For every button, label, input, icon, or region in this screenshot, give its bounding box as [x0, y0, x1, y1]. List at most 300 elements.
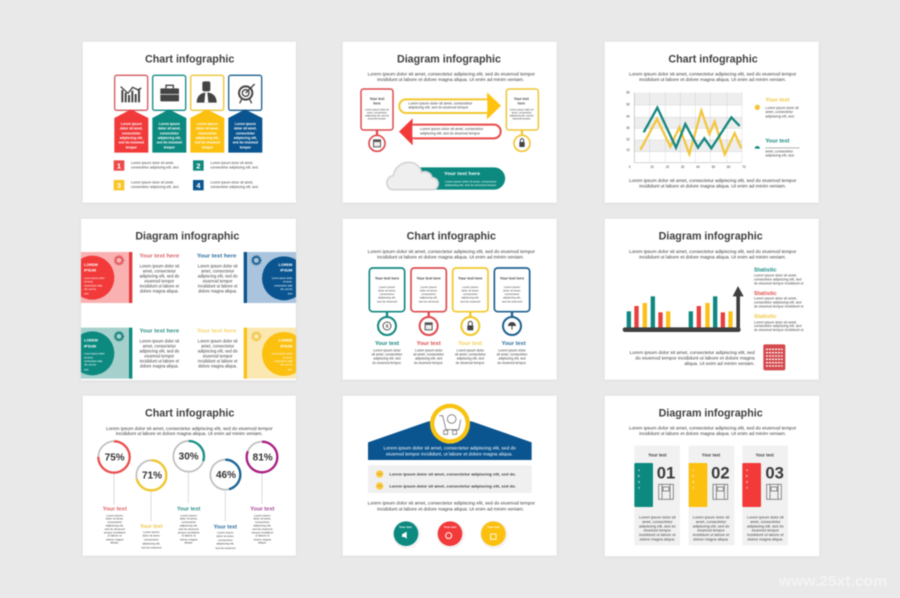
column 01: dolore magna aliqua. — [639, 538, 675, 542]
card: blue target icon — [228, 75, 262, 153]
block: teal: elit, sed do — [84, 364, 97, 367]
card: yellow: sit amet, consectetur — [455, 353, 487, 357]
column 02: incididunt ut labore et — [693, 533, 730, 537]
ring: 46 percent blue: consectetur — [218, 538, 233, 542]
callout: red box with calendar: Lorem ipsum dolor sit — [365, 109, 389, 112]
icon: shopping cart badge — [430, 404, 470, 444]
text column: yellow heading — [197, 329, 238, 369]
ring: 75 percent red: 75% — [105, 452, 125, 463]
intro text — [106, 426, 273, 436]
column 01: Lorem ipsum dolor sit — [639, 516, 677, 520]
text: teal card: adipiscing elit, — [158, 136, 181, 140]
card: teal: Lorem ipsum — [379, 285, 396, 289]
text column: yellow heading: amet, consectetur — [201, 344, 235, 349]
intro text: Lorem ipsum dolor sit amet, consectetur adipiscing elit, sed do eiusmod tempor — [368, 501, 535, 506]
text column: yellow heading: eiusmod tempor — [203, 354, 233, 359]
title: Diagram infographic — [135, 231, 239, 243]
axis labels: 20 — [626, 138, 630, 142]
text column: red heading: dolore magna aliqua. — [140, 289, 179, 294]
axis labels: 40 — [626, 114, 630, 118]
intro text: Lorem ipsum dolor sit amet, consectetur adipiscing elit, sed do eiusmod tempor — [629, 71, 797, 76]
callout: yellow box with padlock: Your text — [514, 97, 530, 101]
card: blue: sed do eiusmod — [502, 299, 522, 303]
block: red: sit amet, — [84, 281, 94, 284]
card: red: sit amet, consectetur — [413, 353, 445, 357]
card: blue: Your text — [502, 341, 526, 347]
title: Diagram infographic — [659, 408, 763, 420]
legend item 3: 3 — [117, 181, 121, 190]
axis labels — [626, 90, 746, 169]
ring: 46 percent blue: Your text — [214, 524, 237, 530]
ring: 75 percent red — [98, 441, 130, 545]
ring: 30 percent teal — [173, 441, 204, 545]
statistic: yellow: Lorem ipsum dolor sit amet, — [754, 320, 797, 324]
legend item 1: Lorem ipsum dolor sit amet, — [131, 161, 174, 165]
ring: 75 percent red: Lorem ipsum — [106, 513, 123, 517]
card: teal: dolor sit amet, — [378, 288, 396, 292]
card: blue: Lorem ipsum — [504, 285, 521, 289]
icon: book — [713, 484, 728, 499]
column 01: incididunt ut labore et — [639, 533, 676, 537]
block: blue: elit, sed do — [280, 288, 293, 291]
text column: yellow heading: incididunt ut labore et — [198, 359, 238, 364]
block: blue: LOREM — [279, 263, 292, 267]
icon: briefcase — [160, 85, 179, 101]
legend: yellow: amet, consectetur — [765, 110, 794, 114]
block: red: Lorem ipsum dolor — [84, 277, 105, 280]
column 02: T — [692, 469, 694, 473]
text column: red heading: amet, consectetur — [143, 269, 176, 274]
column 02: Your text — [702, 452, 721, 457]
checklist — [368, 465, 532, 493]
text column: blue heading: Lorem ipsum dolor sit — [198, 264, 238, 269]
ring: 81 percent purple: Your text — [250, 507, 274, 513]
intro text: Lorem ipsum dolor sit amet, consectetur adipiscing elit, sed do eiusmod tempor — [368, 249, 535, 254]
footer text: Lorem ipsum dolor sit amet, consectetur adipiscing elit, sed — [630, 350, 755, 355]
icon: cloud — [387, 162, 438, 190]
block: yellow: Lorem ipsum dolor — [272, 353, 292, 356]
card: yellow: Lorem ipsum — [462, 285, 479, 289]
card: blue: sit amet, consectetur — [497, 353, 528, 357]
intro text — [629, 249, 797, 259]
text: yellow card: sed do eiusmod — [195, 141, 220, 145]
ring: 71 percent yellow: Your text — [140, 524, 163, 530]
watermark: www.25xt.com — [778, 574, 887, 590]
axis labels: 20 — [666, 165, 669, 169]
text column: teal heading: incididunt ut labore et — [140, 359, 180, 364]
text: red card: consectetur — [122, 131, 141, 135]
badge: red: Your text — [444, 525, 456, 529]
card: red: dolor sit amet, — [420, 288, 438, 292]
ring: 81 percent purple: Lorem ipsum — [254, 513, 271, 517]
ring: 75 percent red: Your text — [103, 507, 127, 513]
block: red: IPSUM — [84, 269, 96, 273]
legend item 3: Lorem ipsum dolor sit amet, — [131, 181, 174, 185]
block: teal: eius — [84, 368, 89, 371]
ring: 30 percent teal: Your text — [177, 507, 201, 513]
text column: blue heading: amet, consectetur — [201, 269, 235, 274]
panel: diagram with house banner and badges — [343, 396, 557, 556]
intro text: Lorem ipsum dolor sit amet, consectetur adipiscing elit, sed do eiusmod tempor — [106, 426, 273, 431]
statistic: teal: consectetur adipiscing elit, sed — [754, 277, 802, 281]
column 03: 03 — [765, 464, 784, 483]
card: red: sed do eiusmod — [419, 299, 439, 303]
ring: 81 percent purple: ut labore et — [255, 534, 270, 538]
column 02: 02 — [711, 464, 730, 483]
column 01: E — [638, 474, 640, 478]
text: red card: adipiscing elit, — [120, 136, 143, 140]
text column: teal heading: amet, consectetur — [143, 344, 176, 349]
card: blue — [494, 268, 530, 365]
axis labels: 0 — [629, 165, 631, 169]
column 02 — [689, 446, 734, 545]
column 03: dolore magna aliqua. — [747, 538, 783, 542]
block: red: consectetur adip — [84, 284, 103, 287]
column 01: X — [638, 480, 640, 484]
ring: 81 percent purple: tempor incididunt — [252, 530, 273, 534]
block: yellow: IPSUM — [280, 344, 292, 348]
text column: yellow heading: adipiscing elit, sed do — [198, 349, 238, 354]
text column: red heading: eiusmod tempor — [144, 279, 175, 284]
card: teal: sed do eiusmod — [377, 299, 397, 303]
icon: gear — [252, 256, 261, 265]
column 03: Your text — [755, 452, 774, 457]
statistic: teal: Statistic — [754, 267, 777, 273]
line chart — [626, 90, 746, 169]
footer text — [629, 178, 797, 189]
intro text: Lorem ipsum dolor sit amet, consectetur adipiscing elit, sed do eiusmod tempor — [629, 426, 797, 431]
card: blue: adipiscing elit, — [503, 296, 521, 300]
text: blue card: sed do eiusmod — [233, 141, 258, 145]
column 01: T — [638, 486, 640, 490]
text: teal card: sed do eiusmod — [157, 141, 182, 145]
ring: 71 percent yellow: 71% — [142, 471, 162, 482]
card: blue: dolor sit amet, — [503, 288, 521, 292]
column 01 — [634, 446, 680, 545]
icon: book — [659, 484, 673, 499]
column 02: amet, consectetur — [696, 520, 727, 524]
ring: 30 percent teal: Lorem ipsum — [180, 513, 197, 517]
statistic: red — [754, 291, 803, 308]
intro text: incididunt ut labore et dolore magna aliqua. Ut enim ad minim veniam. — [639, 254, 786, 259]
ring: 30 percent teal: adipiscing elit, — [180, 523, 198, 527]
card: red: Lorem ipsum — [420, 285, 437, 289]
text: blue card: Lorem ipsum — [235, 122, 256, 126]
column 02: T — [692, 486, 694, 490]
intro text — [368, 71, 535, 82]
arrow: red pointing left: adipiscing elit, sed do eiusmod tempor — [420, 131, 481, 135]
block: blue: sit amet, — [283, 281, 293, 284]
panel: chart infographic with percentage rings — [83, 396, 296, 556]
text column: teal heading: dolore magna aliqua. — [140, 364, 179, 369]
column 03: T — [746, 469, 748, 473]
block: teal: Lorem ipsum dolor — [84, 353, 105, 356]
panel: chart infographic with four rounded cards — [343, 219, 557, 380]
legend: teal: amet, consectetur — [765, 149, 794, 153]
text column: teal heading: eiusmod tempor — [144, 354, 175, 359]
block: red: LOREM — [84, 263, 98, 267]
ring: 81 percent purple: adipiscing elit, — [253, 523, 271, 527]
icon: calendar — [373, 139, 381, 147]
panel: chart infographic with four icon cards — [83, 42, 296, 203]
text: red card — [119, 122, 144, 149]
icon: gear — [252, 332, 261, 341]
title: Diagram infographic — [659, 231, 763, 243]
block: blue: Lorem ipsum dolor — [272, 277, 292, 280]
icon: businessman — [197, 81, 217, 103]
callout: yellow box with padlock: eiusmod tempor. — [512, 118, 531, 121]
ring: 81 percent purple: aliqua. — [258, 541, 267, 545]
footer text: do eiusmod tempor incididunt ut labore et dolore magna — [635, 356, 755, 361]
block: blue: consectetur adip — [274, 284, 293, 287]
arrow: yellow pointing right — [399, 92, 501, 119]
block: teal — [80, 326, 134, 380]
ring: 30 percent teal: dolor sit amet, — [180, 517, 198, 521]
panel: diagram infographic with bar chart — [605, 219, 819, 380]
ring: 46 percent blue: Lorem ipsum — [217, 530, 234, 534]
intro text — [629, 426, 797, 436]
text: blue card — [233, 122, 258, 149]
text: teal card: dolor sit amet, — [158, 126, 181, 130]
text column: red heading — [139, 254, 180, 294]
text: teal card — [157, 122, 182, 149]
ring: 75 percent red: sed do eiusmod — [105, 527, 125, 531]
ring: 81 percent purple: 81% — [253, 452, 273, 463]
ring: 30 percent teal: 30% — [179, 452, 199, 463]
ring: 81 percent purple: dolore magna — [254, 537, 271, 541]
legend item 2: Lorem ipsum dolor sit amet, — [210, 161, 253, 165]
text column: red heading: Your text here — [139, 254, 180, 260]
banner: teal with cloud — [387, 162, 505, 190]
text: red card: Lorem ipsum — [121, 122, 142, 126]
ring: 30 percent teal: sed do eiusmod — [179, 527, 199, 531]
badge: teal — [393, 521, 421, 549]
ring: 75 percent red: dolore magna — [106, 537, 124, 541]
ring: 46 percent blue: sed do eiusmod — [215, 546, 236, 550]
text: yellow card: Lorem ipsum — [197, 122, 218, 126]
icon: gear — [114, 332, 124, 341]
statistic: red: Lorem ipsum dolor sit amet, — [754, 297, 797, 301]
card: yellow: sed do eiusmod — [460, 299, 481, 303]
block: yellow: consectetur adip — [274, 360, 293, 363]
text column: yellow heading: Your text here — [197, 329, 237, 335]
ring: 71 percent yellow: dolor sit amet, — [142, 534, 160, 538]
callout: yellow box with padlock: amet, consectetur — [512, 112, 532, 115]
card: yellow: dolor sit amet, — [461, 288, 479, 292]
block: red — [80, 251, 134, 304]
icon: calendar — [425, 322, 433, 330]
statistic: teal — [754, 267, 803, 285]
bar chart with growth arrow — [623, 286, 744, 332]
card: red — [411, 268, 446, 365]
badge: yellow: Your text — [487, 525, 500, 529]
text column: teal heading — [139, 329, 180, 369]
callout: red box with calendar — [361, 89, 393, 151]
card: yellow: Your text here — [458, 277, 482, 281]
legend item 3 — [114, 180, 179, 190]
footer text: incididunt ut labore et dolore magna aliqua. Ut enim ad minim veniam. — [639, 184, 786, 189]
legend item 4 — [193, 180, 259, 190]
legend: teal: Your text — [765, 138, 790, 144]
text: yellow card: adipiscing elit, — [196, 136, 219, 140]
axis labels: 50 — [626, 102, 630, 106]
house banner: Lorem ipsum dolor sit amet, consectetur adipiscing elit, sed do — [383, 446, 517, 451]
callout: red box with calendar: Your text — [370, 97, 385, 101]
ring: 75 percent red: aliqua. — [110, 541, 119, 545]
banner: teal with cloud: Your text here — [444, 171, 480, 177]
panel: diagram infographic with arrows and cloud — [343, 42, 557, 203]
text: teal card: Lorem ipsum — [159, 122, 180, 126]
card: yellow: do eiusmod tempor. — [456, 361, 485, 365]
column 03: eiusmod tempor — [752, 529, 780, 533]
icon: gear — [114, 256, 124, 265]
ring: 71 percent yellow — [136, 460, 166, 550]
text: teal card: tempor — [164, 145, 176, 149]
arrow: red pointing left — [399, 118, 501, 145]
legend: teal: adipiscing elit, sed. — [765, 154, 795, 158]
card: blue: Lorem ipsum dolor — [498, 349, 527, 353]
legend item 1: consectetur adipiscing elit, sed. — [131, 165, 179, 169]
axis labels: 70 — [742, 165, 746, 169]
ring: 81 percent purple: consectetur — [255, 520, 270, 524]
axis labels: 30 — [626, 126, 630, 130]
text: red card: tempor — [126, 145, 138, 149]
panel: line chart infographic — [605, 42, 819, 203]
text column: teal heading: adipiscing elit, sed do — [139, 349, 180, 354]
axis labels: 10 — [650, 165, 654, 169]
statistic: red: Statistic — [754, 291, 777, 297]
column 03: X — [746, 480, 748, 484]
card: red chart icon — [114, 75, 148, 153]
column 02: eiusmod tempor — [697, 529, 725, 533]
statistic: yellow: consectetur adipiscing elit, sed — [754, 324, 802, 328]
series: yellow line — [640, 111, 741, 154]
legend item 2: 2 — [196, 161, 200, 170]
card: yellow: adipiscing elit, sed — [457, 357, 484, 361]
card: red: Lorem ipsum dolor — [415, 349, 443, 353]
text: yellow card: dolor sit amet, — [196, 126, 219, 130]
intro text: Lorem ipsum dolor sit amet, consectetur adipiscing elit, sed do eiusmod tempor — [368, 71, 535, 76]
house banner — [368, 421, 532, 460]
callout: yellow box with padlock: Lorem ipsum dolor sit — [510, 109, 534, 112]
icon: padlock — [519, 139, 525, 147]
icon: target — [239, 84, 255, 103]
text column: blue heading: dolore magna aliqua. — [198, 289, 237, 294]
column 03: amet, consectetur — [750, 520, 781, 524]
column 01: eiusmod tempor — [644, 529, 672, 533]
text column: red heading: adipiscing elit, sed do — [139, 274, 180, 279]
house banner: eiusmod tempor incididunt, ut labore et dolore magna aliqua. — [386, 451, 513, 456]
card: yellow: Lorem ipsum dolor — [457, 349, 485, 353]
icon: abacus — [763, 344, 785, 370]
intro text: incididunt ut labore et dolore magna aliqua. Ut enim ad minim veniam. — [639, 77, 786, 82]
block: red: eius — [84, 293, 89, 296]
text column: blue heading: eiusmod tempor — [203, 279, 233, 284]
block: teal: sit amet, — [84, 356, 94, 359]
panel: diagram infographic with numbered columns — [605, 396, 819, 556]
block: red: elit, sed do — [84, 288, 97, 291]
statistic: yellow: do eiusmod tempor incididunt ut — [754, 328, 803, 332]
ring: 30 percent teal: dolore magna — [180, 537, 198, 541]
footer text — [630, 350, 755, 366]
title: Chart infographic — [668, 54, 758, 66]
column 03: Lorem ipsum dolor sit — [747, 516, 785, 520]
text: blue card: tempor — [240, 145, 252, 149]
badge: teal: Your text — [399, 525, 412, 529]
column 03 — [742, 446, 788, 545]
block: blue — [244, 252, 306, 303]
card: yellow — [453, 268, 488, 365]
title: Chart infographic — [145, 54, 234, 66]
card: yellow: consectetur — [463, 292, 478, 296]
text column: blue heading: adipiscing elit, sed do — [198, 274, 238, 279]
legend: yellow: adipiscing elit, sed. — [765, 114, 795, 118]
banner: teal with cloud: Lorem ipsum dolor sit amet, consectetur — [445, 179, 496, 183]
intro text: Lorem ipsum dolor sit amet, consectetur adipiscing elit, sed do eiusmod tempor — [629, 249, 797, 254]
card: red: adipiscing elit, sed — [415, 357, 442, 361]
card: blue: adipiscing elit, sed — [498, 357, 526, 361]
text column: blue heading — [197, 254, 238, 294]
column 03: E — [746, 474, 748, 478]
callout: yellow box with padlock — [506, 89, 538, 151]
card: blue: consectetur — [505, 292, 519, 296]
block: blue: IPSUM — [280, 269, 292, 273]
card: teal: consectetur — [380, 292, 394, 296]
intro text — [368, 249, 535, 259]
column 02: Lorem ipsum dolor sit — [693, 516, 730, 520]
axis labels: 40 — [696, 165, 700, 169]
axis labels: 30 — [681, 165, 685, 169]
card: yellow: adipiscing elit, — [461, 296, 479, 300]
column 03: incididunt ut labore et — [747, 533, 784, 537]
block: yellow: LOREM — [279, 339, 292, 343]
card: yellow person icon — [190, 75, 224, 153]
title: Chart infographic — [407, 231, 496, 243]
text: red card: sed do eiusmod — [119, 141, 144, 145]
axis labels: 60 — [626, 90, 630, 94]
text: yellow card — [195, 122, 220, 149]
legend: yellow: Your text — [765, 97, 790, 103]
ring: 71 percent yellow: consectetur — [144, 538, 159, 542]
ring: 46 percent blue: dolor sit amet, — [216, 534, 234, 538]
ring: 46 percent blue: 46% — [216, 470, 236, 481]
card: teal: adipiscing elit, sed — [373, 357, 401, 361]
ring: 75 percent red: consectetur — [107, 520, 122, 524]
text column: red heading: incididunt ut labore et — [140, 284, 180, 289]
axis labels: 60 — [727, 165, 731, 169]
card: red: do eiusmod tempor. — [414, 361, 443, 365]
text: blue card: adipiscing elit, — [234, 136, 257, 140]
panel: diagram infographic with four corner blocks — [70, 219, 306, 380]
block: yellow: sit amet, — [283, 356, 293, 359]
text: red card: dolor sit amet, — [120, 126, 143, 130]
ring: 46 percent blue: adipiscing elit, — [216, 542, 234, 546]
badge: yellow — [480, 521, 508, 549]
card: blue: Your text here — [500, 277, 524, 281]
card: teal: Your text — [375, 341, 399, 347]
icon: umbrella — [508, 322, 516, 330]
callout: red box with calendar: amet, consectetur — [367, 112, 387, 115]
text: yellow card: consectetur — [198, 131, 217, 135]
badge: red — [437, 521, 465, 549]
legend item 3: consectetur adipiscing elit, sed. — [131, 185, 179, 189]
footer text: aliqua. Ut enim ad minim veniam. — [684, 361, 755, 366]
intro text — [629, 71, 797, 82]
legend: yellow: Lorem ipsum dolor sit — [765, 106, 799, 110]
column 01: adipiscing elit, sed do — [639, 524, 676, 528]
block: teal: IPSUM — [84, 344, 96, 348]
arrow: red pointing left: Lorem ipsum dolor sit amet, consectetur — [420, 127, 484, 131]
